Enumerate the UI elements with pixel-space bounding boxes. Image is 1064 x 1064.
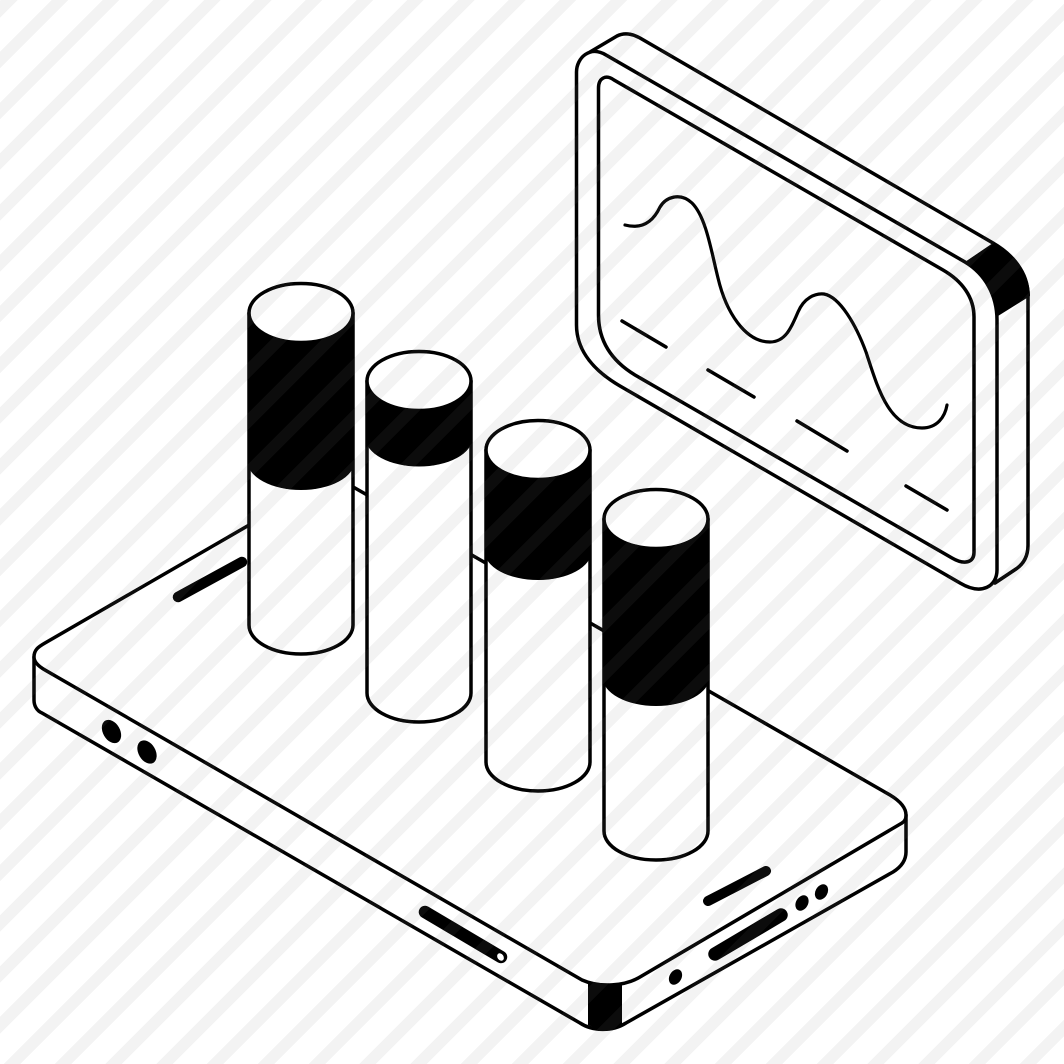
- chart axis tick 2: [708, 370, 754, 397]
- bar chart cylinders: [248, 284, 710, 860]
- side button 1: [98, 716, 125, 747]
- charging slot: [715, 915, 781, 954]
- port dot 2: [812, 882, 831, 902]
- monitor: [576, 34, 1030, 589]
- phone earpiece speaker: [178, 562, 242, 597]
- side button 2: [133, 737, 161, 767]
- line chart curve: [625, 197, 947, 428]
- phone black corner band: [588, 983, 622, 1029]
- cylinder 3: [484, 420, 592, 791]
- phone side body: [34, 657, 906, 1029]
- cylinder 2: [366, 352, 472, 722]
- chart axis tick 1: [622, 321, 666, 347]
- monitor screen: [598, 77, 974, 562]
- cylinder 1: [248, 284, 354, 654]
- chart axis tick 3: [797, 421, 847, 451]
- port dot 3: [666, 967, 685, 987]
- cylinder 4: [602, 490, 710, 860]
- phone home speaker: [708, 871, 766, 901]
- monitor back and side body: [590, 34, 1028, 583]
- chart axis tick 4: [906, 486, 947, 510]
- side slot with hole: [425, 912, 505, 962]
- phone top face: [34, 476, 906, 985]
- phone: [34, 476, 906, 1029]
- monitor front frame: [576, 51, 997, 589]
- monitor black corner band: [965, 243, 1030, 316]
- port dot 1: [793, 893, 811, 913]
